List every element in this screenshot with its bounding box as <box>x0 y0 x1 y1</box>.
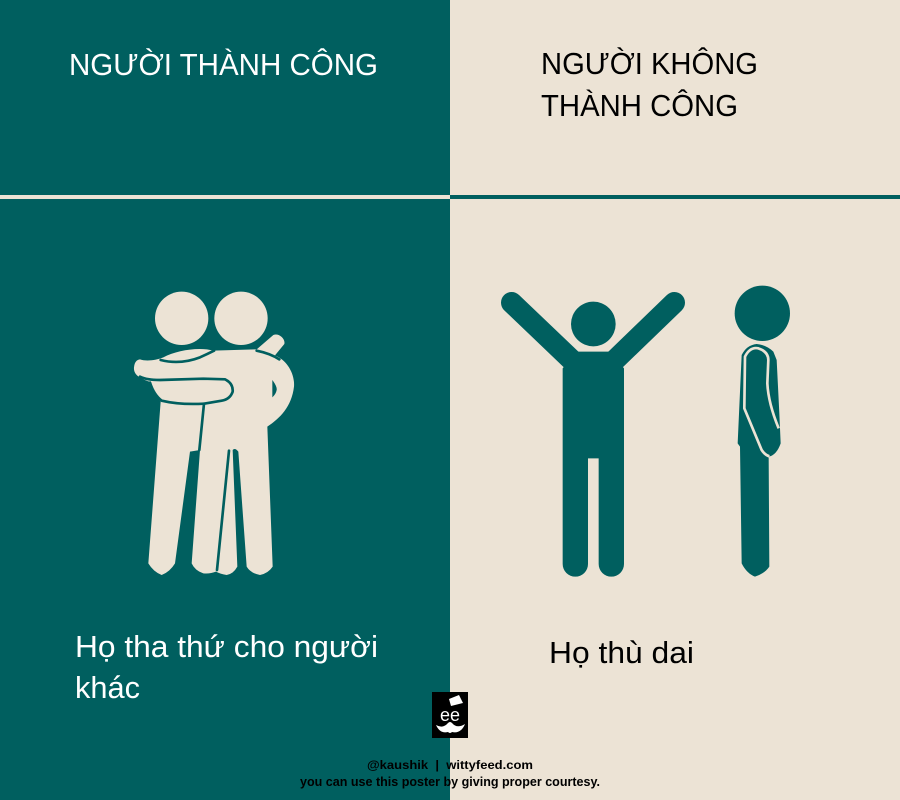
logo: hat, ee and moustache: ee <box>440 705 460 725</box>
caption: they forgive others: Họ tha thứ cho người <box>75 629 378 664</box>
heading: unsuccessful people <box>541 46 758 123</box>
caption: they hold grudges: Họ thù dai <box>549 635 694 670</box>
icon: person cheering with raised arms <box>512 302 674 577</box>
panel: unsuccessful people background <box>450 0 900 800</box>
panel: successful people background <box>0 0 450 800</box>
courtesy notice: you can use this poster by giving proper courtesy. <box>300 775 600 789</box>
heading: unsuccessful people: NGƯỜI KHÔNG <box>541 46 758 81</box>
caption: they forgive others: khác <box>75 670 140 705</box>
icon: person standing with back turned <box>735 286 790 577</box>
icon: two people hugging <box>134 292 294 575</box>
heading: unsuccessful people: THÀNH CÔNG <box>541 88 738 123</box>
caption: they forgive others <box>75 629 378 705</box>
logo: hat, ee and moustache <box>432 692 468 738</box>
credit line: author and site: @kaushik | wittyfeed.com <box>367 758 533 772</box>
heading: successful people: NGƯỜI THÀNH CÔNG <box>69 47 378 82</box>
